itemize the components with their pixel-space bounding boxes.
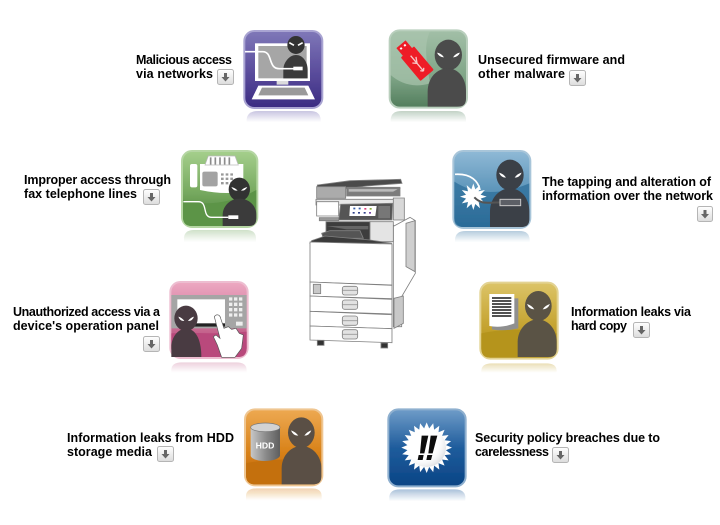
icon: information leaks from HDD storage media: HDD — [256, 440, 274, 450]
label: unsecured firmware and other malware: other malware — [478, 67, 565, 81]
label: unauthorized access via operation panel: device's operation panel — [13, 319, 159, 333]
icon: tapping and alteration of information — [453, 151, 530, 245]
printer drawers — [310, 282, 392, 299]
label: information leaks from HDD storage media: storage media — [67, 445, 153, 459]
label: malicious access via networks: Malicious access — [136, 53, 232, 67]
label: tapping and alteration of information: information over the network — [542, 189, 713, 203]
printer main body — [310, 236, 392, 243]
printer casters — [317, 340, 324, 345]
printer output tray — [326, 222, 370, 241]
label: security policy breaches due to carelessness: Security policy breaches due to — [475, 431, 660, 445]
printer scanner — [317, 179, 402, 189]
label: security policy breaches due to carelessness: carelessness — [475, 445, 549, 459]
icon: information leaks via hard copy — [480, 283, 558, 375]
icon: malicious access via networks — [244, 31, 322, 125]
icon: unsecured firmware and other malware — [390, 30, 467, 125]
label: information leaks via hard copy: hard copy — [571, 319, 627, 333]
icon: unauthorized access via operation panel — [170, 282, 248, 375]
icon: improper access through fax telephone lines — [182, 151, 257, 245]
label: improper access through fax telephone lines: Improper access through — [24, 173, 171, 187]
label: malicious access via networks: via networks — [136, 67, 213, 81]
label: unsecured firmware and other malware — [478, 53, 625, 86]
label: information leaks from HDD storage media — [67, 431, 234, 462]
label: improper access through fax telephone lines: fax telephone lines — [24, 187, 137, 201]
printer control panel — [339, 203, 393, 220]
label: security policy breaches due to carelessness — [475, 431, 660, 462]
icon: security policy breaches due to carelessness — [388, 409, 466, 504]
icon: information leaks from HDD storage media — [245, 409, 322, 503]
label: unsecured firmware and other malware: Unsecured firmware and — [478, 53, 625, 67]
label: tapping and alteration of information: The tapping and alteration of — [542, 175, 712, 189]
label: unauthorized access via operation panel: Unauthorized access via a — [13, 305, 161, 319]
label: information leaks from HDD storage media: Information leaks from HDD — [67, 431, 234, 445]
printer side unit — [393, 217, 415, 327]
printer — [310, 179, 415, 348]
label: unauthorized access via operation panel — [13, 305, 161, 352]
label: tapping and alteration of information — [542, 175, 713, 222]
label: improper access through fax telephone lines — [24, 173, 171, 204]
label: malicious access via networks — [136, 53, 234, 84]
label: information leaks via hard copy: Information leaks via — [571, 305, 692, 319]
label: information leaks via hard copy — [571, 305, 692, 338]
